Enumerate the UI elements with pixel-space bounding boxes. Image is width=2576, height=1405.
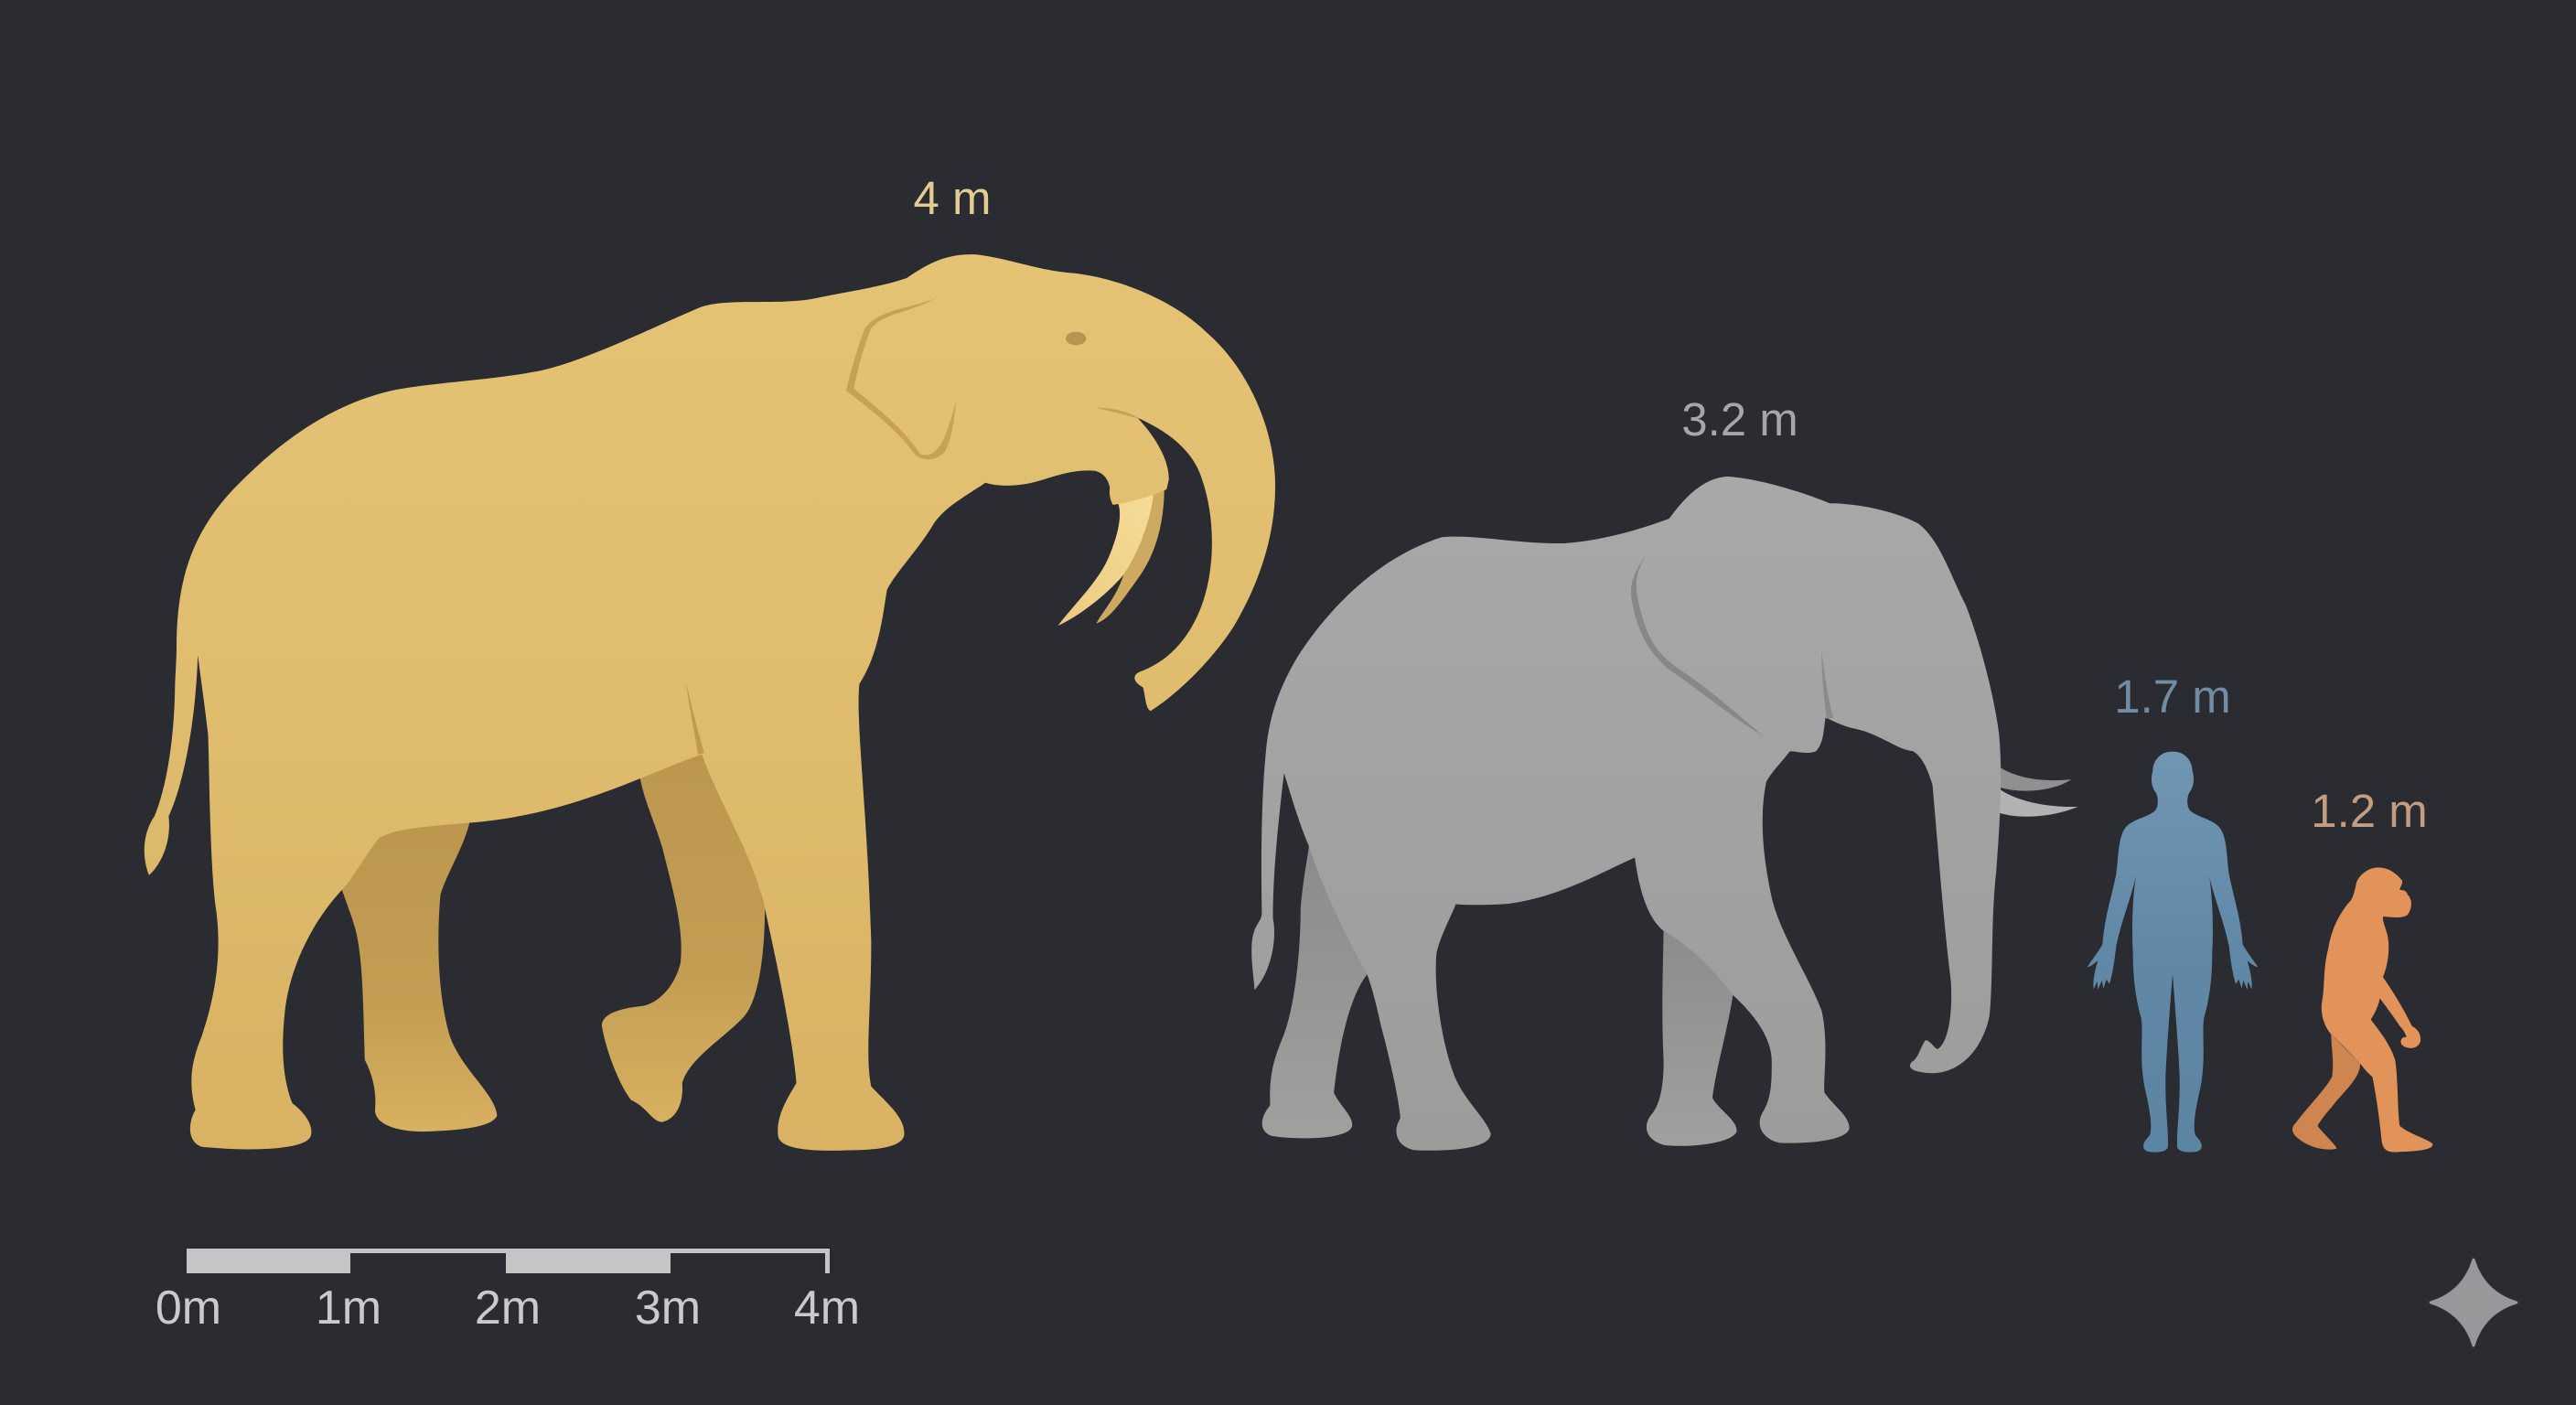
scale top line: [187, 1249, 830, 1253]
neck crease: [1821, 651, 1833, 719]
ear crease: [1631, 553, 1764, 735]
far hind leg: [342, 815, 497, 1132]
lower tusk: [1999, 788, 2078, 817]
height label: 3.2 m: 3.2 m: [1681, 393, 1798, 445]
ear outline: [846, 297, 956, 459]
scale labels: 4m: [794, 1282, 860, 1335]
height label: 1.7 m: 1.7 m: [2114, 670, 2231, 723]
body, head and trunk: [145, 254, 1275, 1151]
mouth line: [1096, 408, 1141, 419]
early hominin silhouette: [2292, 867, 2432, 1153]
gold body group: [145, 254, 1275, 1151]
far hind leg: [1262, 846, 1367, 1138]
gold proboscidean silhouette: [145, 254, 1275, 1151]
front tusk: [1058, 491, 1154, 626]
body, head and trunk: [1251, 477, 2001, 1151]
scale bar: [156, 1249, 860, 1335]
gold animal tusks: [1058, 487, 1165, 626]
scale end tick: [825, 1249, 830, 1273]
rear tusk: [1096, 487, 1165, 624]
eye: [1066, 332, 1086, 345]
near body and leg: [2322, 867, 2432, 1153]
upper tusk: [1999, 767, 2071, 791]
far leg: [2292, 1035, 2360, 1150]
height label: 4 m: 4 m: [913, 172, 992, 224]
scale labels: 2m: [475, 1282, 541, 1335]
human silhouette: [2088, 752, 2258, 1153]
scale segment 0 to 1 m: [187, 1249, 350, 1273]
haunch crease: [686, 682, 704, 755]
gray elephant silhouette: [1251, 477, 2078, 1151]
height label: 1.2 m: 1.2 m: [2311, 785, 2428, 837]
scale segment 2 to 3 m: [506, 1249, 671, 1273]
scale labels: 0m: [156, 1282, 221, 1335]
far front leg: [1647, 918, 1737, 1146]
scale labels: 3m: [635, 1282, 701, 1335]
scale labels: 1m: [316, 1282, 381, 1335]
far front leg: [602, 741, 765, 1122]
scale labels: [156, 1282, 860, 1335]
icon: four-point sparkle: [2431, 1260, 2517, 1346]
